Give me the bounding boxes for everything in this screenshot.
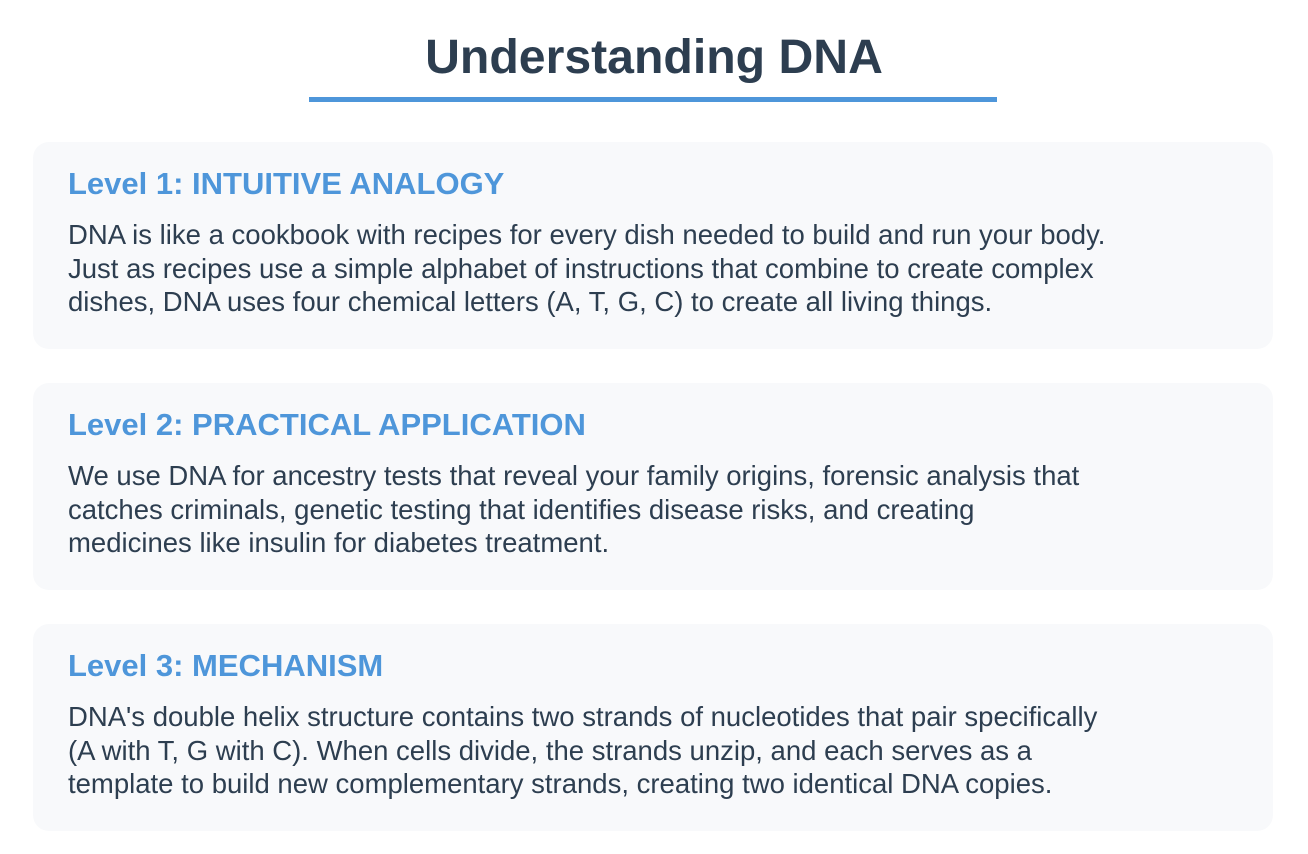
- panel: level 2: [33, 383, 1273, 590]
- text: level 1 description: DNA is like a cookbook with recipes for every dish needed to build and run your body.: [68, 219, 1105, 250]
- title: Understanding DNA: [425, 30, 883, 84]
- text: level 3 description: template to build new complementary strands, creating two identical DNA copies.: [68, 768, 1052, 799]
- text: level 2 description: medicines like insulin for diabetes treatment.: [68, 527, 609, 558]
- text: level 1 description: [68, 219, 1105, 317]
- text: level 3 description: DNA's double helix structure contains two strands of nucleotides that pair specifically: [68, 701, 1097, 732]
- title underline: [309, 97, 997, 102]
- text: level 3 description: [68, 701, 1098, 799]
- panel: level 1: [33, 142, 1273, 349]
- text: level 2 description: We use DNA for ancestry tests that reveal your family origins, forensic analysis that: [68, 460, 1079, 491]
- heading: level 1: Level 1: INTUITIVE ANALOGY: [68, 166, 504, 201]
- text: level 3 description: (A with T, G with C). When cells divide, the strands unzip, and each serves as a: [68, 734, 1032, 766]
- text: level 2 description: catches criminals, genetic testing that identifies disease risks, and creating: [68, 494, 974, 524]
- heading: level 3: Level 3: MECHANISM: [68, 648, 383, 683]
- heading: level 2: Level 2: PRACTICAL APPLICATION: [68, 407, 586, 442]
- text: level 2 description: [68, 460, 1080, 558]
- text: level 1 description: Just as recipes use a simple alphabet of instructions that combine to create complex: [68, 252, 1094, 284]
- panel: level 3: [33, 624, 1273, 831]
- text: level 1 description: dishes, DNA uses four chemical letters (A, T, G, C) to create all living things.: [68, 286, 992, 317]
